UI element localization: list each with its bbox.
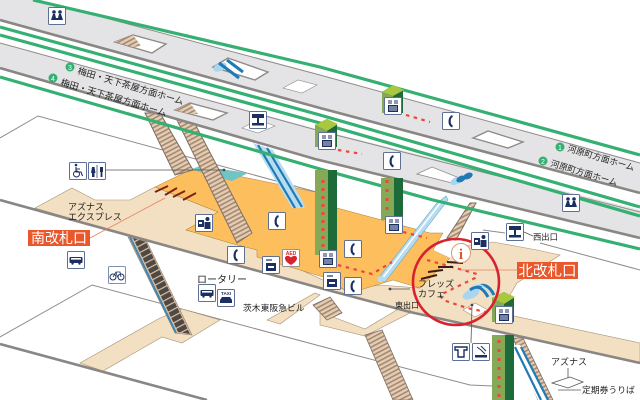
icon: phone 6 <box>344 278 362 294</box>
icon: wheelchair <box>70 162 86 180</box>
icon: elevator 3 <box>496 306 512 324</box>
elevator column 1 <box>315 119 338 255</box>
label: platform 4: 4 <box>51 76 55 83</box>
track lines and platforms <box>0 0 640 249</box>
label: platform 4: 梅田・天下茶屋方面ホーム <box>59 76 168 118</box>
void beside elevator <box>463 303 488 317</box>
platform: upper <box>0 0 640 193</box>
north gate line <box>460 269 517 271</box>
elevator column 3 <box>492 292 515 400</box>
north escalator <box>461 285 494 302</box>
escalator lower right <box>513 345 548 400</box>
south stairs with escalator <box>128 237 192 335</box>
label: azunasu express: アズナス <box>68 201 104 212</box>
icon: toilet <box>88 162 106 180</box>
icon: phone 5 <box>344 240 362 258</box>
label: west exit: 西出口 <box>533 232 558 242</box>
icon: locker 2 <box>324 272 340 290</box>
label: friends cafe: フレッズ <box>418 278 454 289</box>
elevator column 2 <box>381 85 404 220</box>
platform edges <box>0 0 640 212</box>
teal area <box>192 166 248 181</box>
south plaza floor <box>80 309 220 371</box>
label: friends cafe: カフェ <box>418 289 445 299</box>
icon: smoking <box>472 344 490 360</box>
lower floor strips <box>267 293 412 336</box>
label: platform 1: 1 <box>558 145 562 152</box>
ground outlines <box>0 116 640 386</box>
concourse floor north <box>345 242 640 363</box>
icon: taxi <box>218 290 234 306</box>
icon: phone 2 <box>384 152 400 170</box>
platform: lower <box>0 43 640 238</box>
icon: phone 1 <box>442 112 460 130</box>
icon: bus rotary <box>198 284 216 302</box>
south ticket gates <box>155 186 196 200</box>
icon: people right <box>562 194 580 212</box>
void above north gate <box>433 238 460 258</box>
label: platform 1: 河原町方面ホーム <box>566 142 636 173</box>
label: commuter pass counter: 定期券うりば <box>582 384 635 395</box>
icon: shirt counter <box>452 344 470 360</box>
leader lines <box>105 169 583 390</box>
label: rotary: ロータリー <box>197 274 247 286</box>
label: platform 2: 2 <box>541 159 545 166</box>
icon: elevator 4 <box>320 250 336 268</box>
icon: taxi: TAXI <box>221 291 231 296</box>
label: azunasu express <box>68 201 122 222</box>
route dots <box>338 115 486 312</box>
orange paid area <box>155 169 450 290</box>
concourse floor west <box>35 187 345 295</box>
platform escalator tops <box>212 60 474 187</box>
label: south gate: 南改札口 <box>31 230 87 246</box>
icon: elevator 2 <box>384 98 402 114</box>
info mark <box>452 244 470 263</box>
label: platform 2: 河原町方面ホーム <box>549 157 619 188</box>
escalator centre <box>377 196 448 282</box>
label: north gate: 北改札口 <box>518 263 576 280</box>
label: friends cafe <box>418 278 454 299</box>
platform openings <box>115 35 523 183</box>
label: platform 3: 3 <box>68 65 72 72</box>
red highlight circle <box>413 239 499 325</box>
icon: AED: AED <box>286 251 297 257</box>
icon: staff counter <box>196 214 212 232</box>
label: east exit: 東出口 <box>395 300 419 310</box>
north ticket gates <box>421 262 463 279</box>
label: ibaraki higashi hankyu building: 茨木東阪急ビル <box>243 302 305 313</box>
label: azunasu: アズナス <box>551 356 587 367</box>
icon: phone 3 <box>268 212 286 230</box>
icon: AED <box>282 250 300 266</box>
info mark: i <box>459 247 463 263</box>
icon: locker 1 <box>262 256 280 274</box>
icon: elevator 1 <box>318 132 336 150</box>
escalator left <box>253 143 305 208</box>
label: azunasu express: エクスプレス <box>68 212 122 222</box>
lower stairs <box>313 297 553 400</box>
icon: ticket machine west <box>506 224 524 240</box>
icon: phone 4 <box>228 246 244 264</box>
icon: bus left <box>68 252 84 268</box>
label: platform 3: 梅田・天下茶屋方面ホーム <box>76 65 185 107</box>
icon: elevator 5 <box>386 216 402 234</box>
icon: bicycle <box>108 266 126 284</box>
icon: people top left <box>48 8 66 24</box>
stairs: platform to concourse <box>145 113 476 243</box>
green tracks <box>0 0 640 249</box>
icon: staff north <box>472 232 488 250</box>
icon: ticket machine platform <box>250 112 266 128</box>
thick road lines <box>0 200 640 400</box>
south gate line <box>90 198 165 238</box>
